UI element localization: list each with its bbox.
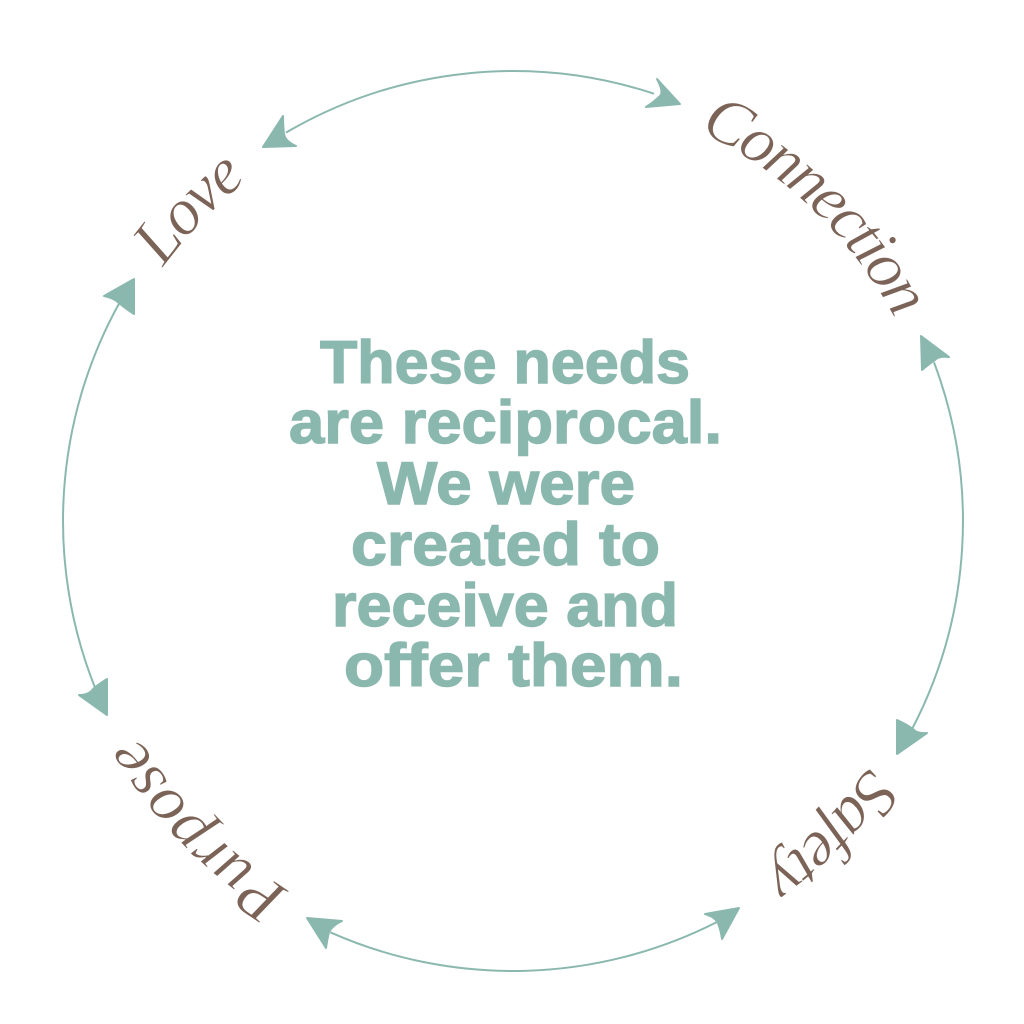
arrow: connection to safety [897,336,963,754]
label: Purpose: Purpose [116,742,289,922]
center message: We were [377,450,635,517]
arrow: safety to purpose [307,908,739,971]
center message: are reciprocal. [289,389,722,456]
center message: receive and [332,572,678,639]
center message [289,329,722,699]
label: Safety: Safety [774,770,895,897]
arrow: love to connection [263,71,680,147]
label: Love: Love [134,160,241,268]
center message: These needs [320,329,690,396]
center message: created to [351,511,660,578]
center message: offer them. [344,632,683,699]
arrow: purpose to love [63,279,134,715]
label: Connection: Connection [708,102,918,316]
